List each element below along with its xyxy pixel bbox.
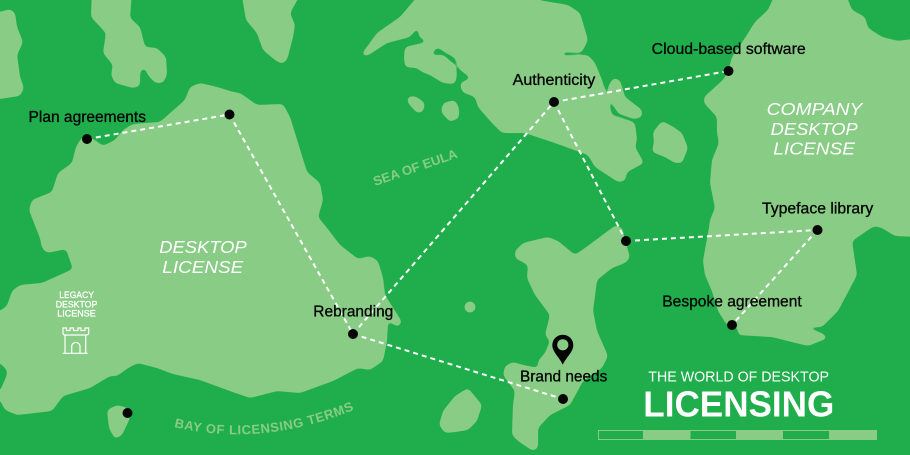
region label: legacy desktop license: LEGACY [59, 290, 94, 300]
region label: legacy desktop license [56, 290, 97, 318]
icon: castle [63, 328, 89, 353]
continent: desktop license [0, 83, 402, 415]
label: bay of licensing terms: BAY OF LICENSING TERMS [174, 402, 353, 434]
label: Brand needs: Brand needs [520, 368, 608, 385]
label: Rebranding: Rebranding [313, 304, 393, 321]
label: Plan agreements: Plan agreements [28, 109, 146, 126]
continent: company desktop license [703, 0, 910, 346]
island: top left peninsula [91, 0, 167, 88]
region label: company desktop license: DESKTOP [771, 119, 858, 139]
region label: desktop license: LICENSE [162, 257, 244, 277]
title: THE WORLD OF DESKTOP [648, 369, 829, 385]
label: sea of EULA: SEA OF EULA [371, 146, 460, 189]
island: south centre [439, 388, 482, 433]
label: Typeface library: Typeface library [762, 200, 874, 217]
island: top centre-left [241, 0, 303, 64]
region label: desktop license: DESKTOP [159, 237, 247, 257]
island: Authenticity landmass [361, 0, 644, 182]
island: small northern cluster [404, 42, 457, 84]
region label: legacy desktop license: LICENSE [57, 308, 96, 318]
region label: company desktop license [767, 99, 864, 158]
islet: sea of EULA east [441, 100, 459, 122]
route stop dots [82, 66, 822, 418]
region label: legacy desktop license: DESKTOP [56, 299, 97, 309]
islet: bottom left [107, 405, 130, 439]
title: LICENSING [643, 383, 834, 424]
island: oval islet [652, 121, 688, 163]
island: top left edge [0, 9, 24, 99]
label: Authenticity: Authenticity [513, 72, 596, 89]
label: Bespoke agreement: Bespoke agreement [662, 294, 802, 311]
region label: desktop license [159, 237, 247, 277]
region label: company desktop license: LICENSE [773, 138, 855, 158]
scale bar [598, 430, 877, 440]
region label: company desktop license: COMPANY [767, 99, 864, 119]
label: Cloud-based software: Cloud-based software [652, 41, 806, 58]
islet: sea of EULA west [407, 96, 425, 113]
islet: round [464, 301, 476, 313]
island: long islet [608, 78, 642, 119]
dashed route lines [87, 71, 818, 399]
icon: location pin [552, 335, 573, 365]
island: Brand needs [503, 225, 630, 451]
